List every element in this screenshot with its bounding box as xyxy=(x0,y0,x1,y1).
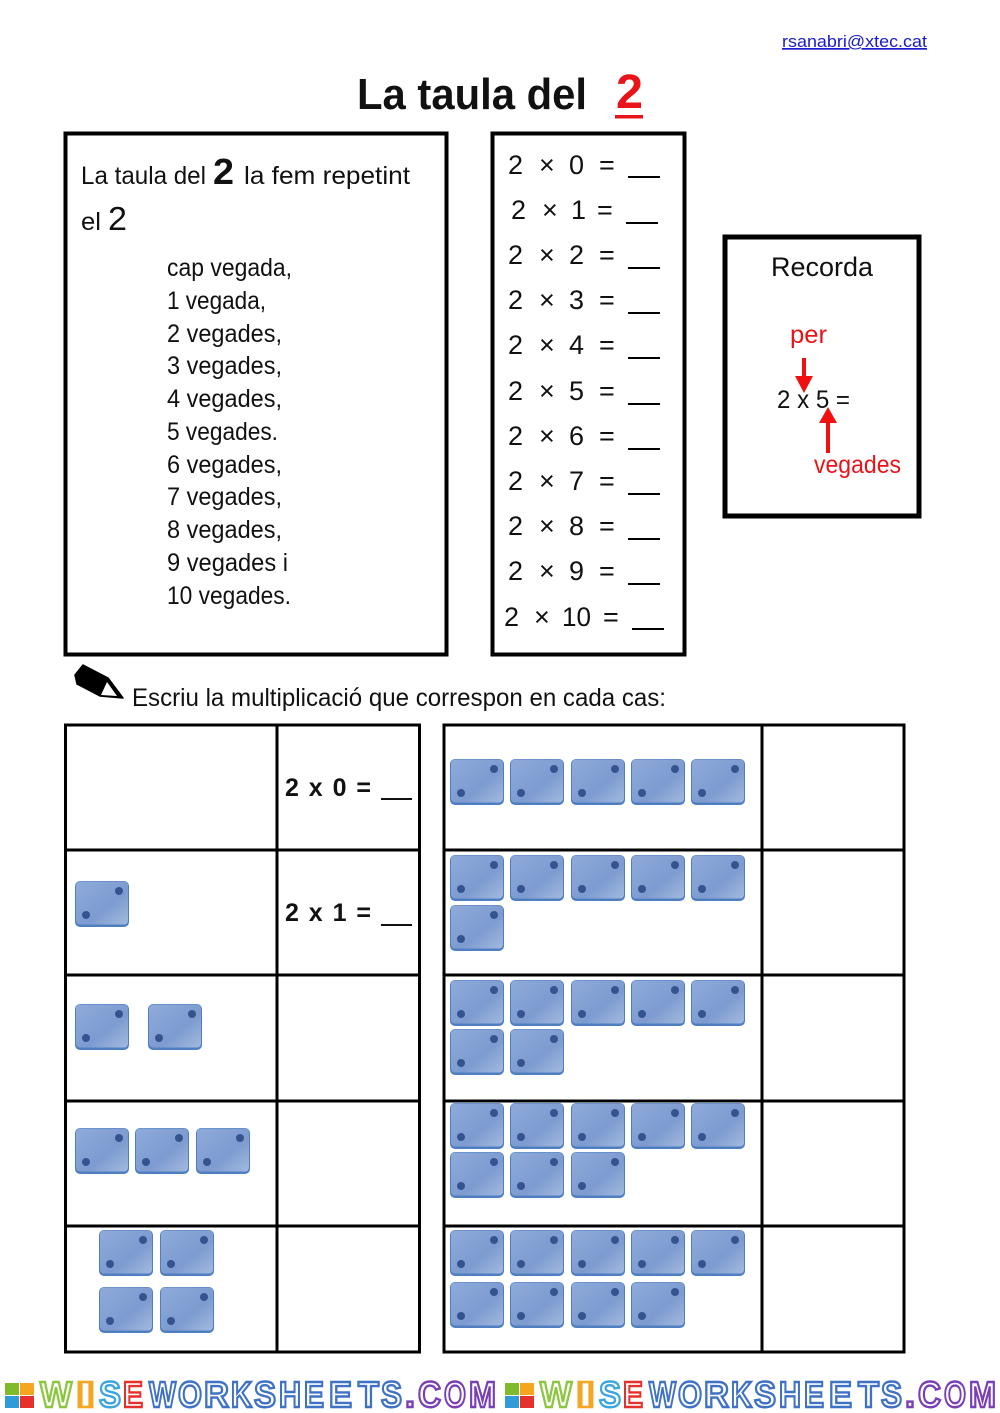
dominoes: five xyxy=(450,759,745,805)
panel: times table of 2: × xyxy=(539,330,555,360)
dominoes: nine xyxy=(450,1230,745,1328)
list of repetitions: 1 vegada, xyxy=(167,287,266,315)
panel: times table of 2: 6 xyxy=(569,421,584,451)
panel: times table of 2: = xyxy=(599,285,615,315)
title: La taula del xyxy=(357,70,587,119)
list of repetitions: 7 vegades, xyxy=(167,483,282,511)
title: 2 xyxy=(616,66,643,119)
panel: times table of 2: × xyxy=(542,195,558,225)
panel: times table of 2: × xyxy=(539,466,555,496)
wordmark left xyxy=(40,1374,496,1413)
panel: times table of 2: = xyxy=(599,421,615,451)
panel: times table of 2: × xyxy=(534,602,550,632)
label: per: per xyxy=(790,321,827,349)
list of repetitions: 10 vegades. xyxy=(167,582,291,610)
panel: times table of 2: 10 xyxy=(562,602,591,632)
panel: times table of 2: 2 xyxy=(508,150,523,180)
intro sentence: 2 xyxy=(213,151,234,192)
dominoes: three xyxy=(75,1128,250,1174)
list of repetitions: 4 vegades, xyxy=(167,385,282,413)
intro sentence: la fem repetint xyxy=(244,162,410,190)
panel: explanation text xyxy=(66,134,446,654)
panel: times table of 2: × xyxy=(539,285,555,315)
icon: pencil xyxy=(75,665,123,698)
panel: times table of 2: 2 xyxy=(508,421,523,451)
panel: times table of 2: 2 xyxy=(508,330,523,360)
reminder heading: Recorda xyxy=(771,252,874,282)
panel: times table of 2: 1 xyxy=(571,195,586,225)
panel: times table of 2: = xyxy=(603,602,619,632)
list of repetitions xyxy=(167,254,292,610)
exercise: 2 x 0: 2 x 0 = xyxy=(285,774,371,802)
panel: times table of 2: 7 xyxy=(569,466,584,496)
panel: times table of 2: 2 xyxy=(508,376,523,406)
arrow: up to the five xyxy=(819,407,837,453)
panel: times table of 2: = xyxy=(599,376,615,406)
panel: times table of 2: 0 xyxy=(569,150,584,180)
panel: times table of 2: × xyxy=(539,556,555,586)
panel: times table of 2: 3 xyxy=(569,285,584,315)
arrow: down to multiplication sign xyxy=(795,358,813,393)
exercise: 2 x 1 xyxy=(285,899,412,927)
exercise: 2 x 1: 2 x 1 = xyxy=(285,899,371,927)
intro sentence: 2 xyxy=(108,200,127,237)
panel: reminder xyxy=(725,237,919,516)
logo: wise tile right xyxy=(505,1383,534,1408)
panel: times table of 2: = xyxy=(599,150,615,180)
list of repetitions: 9 vegades i xyxy=(167,549,288,577)
list of repetitions: cap vegada, xyxy=(167,254,292,282)
panel: times table of 2: × xyxy=(539,421,555,451)
list of repetitions: 3 vegades, xyxy=(167,352,282,380)
panel: times table of 2: 2 xyxy=(511,195,526,225)
panel: times table of 2: × xyxy=(539,150,555,180)
panel: times table of 2: 4 xyxy=(569,330,584,360)
panel: times table of 2: 9 xyxy=(569,556,584,586)
list of repetitions: 8 vegades, xyxy=(167,516,282,544)
panel: times table of 2: 2 xyxy=(508,240,523,270)
intro sentence xyxy=(81,151,410,237)
dominoes: two xyxy=(75,1004,202,1050)
panel: times table of 2: = xyxy=(599,466,615,496)
label: vegades: vegades xyxy=(814,451,901,479)
panel: times table of 2: 2 xyxy=(508,511,523,541)
panel: times table of 2: 2 xyxy=(508,466,523,496)
list of repetitions: 2 vegades, xyxy=(167,320,282,348)
intro sentence: La taula del xyxy=(81,162,206,190)
intro sentence: el xyxy=(81,208,101,236)
panel: times table of 2: 2 xyxy=(508,556,523,586)
email link: rsanabri@xtec.cat xyxy=(782,32,927,51)
panel: times table of 2: × xyxy=(539,511,555,541)
footer watermark xyxy=(5,1374,996,1413)
panel: times table of 2: × xyxy=(539,376,555,406)
panel: times table of 2: = xyxy=(599,511,615,541)
table: left exercises grid xyxy=(65,725,420,1352)
panel: times table of 2: × xyxy=(539,240,555,270)
dominoes: four xyxy=(99,1230,214,1333)
equation: 2 x 5 = xyxy=(777,386,850,414)
panel: times table of 2: 2 xyxy=(508,285,523,315)
panel: times table of 2: 2 xyxy=(504,602,519,632)
table: right exercises grid xyxy=(444,725,904,1352)
exercise: 2 x 0 xyxy=(285,774,412,802)
logo: wise tile left xyxy=(5,1383,34,1408)
panel: times table of 2: = xyxy=(599,556,615,586)
dominoes: six xyxy=(450,855,745,951)
panel: times table of 2: = xyxy=(599,330,615,360)
panel: times table of 2: 2 xyxy=(569,240,584,270)
panel: times table of 2 xyxy=(492,134,684,654)
panel: times table of 2: = xyxy=(597,195,613,225)
panel: times table of 2: = xyxy=(599,240,615,270)
wordmark right xyxy=(540,1374,996,1413)
instruction text: Escriu la multiplicació que correspon en cada cas: xyxy=(132,684,666,712)
dominoes: one xyxy=(75,881,129,927)
dominoes: seven xyxy=(450,980,745,1075)
list of repetitions: 6 vegades, xyxy=(167,451,282,479)
panel: times table of 2: 8 xyxy=(569,511,584,541)
list of repetitions: 5 vegades. xyxy=(167,418,278,446)
panel: times table of 2: 5 xyxy=(569,376,584,406)
dominoes: eight xyxy=(450,1103,745,1198)
